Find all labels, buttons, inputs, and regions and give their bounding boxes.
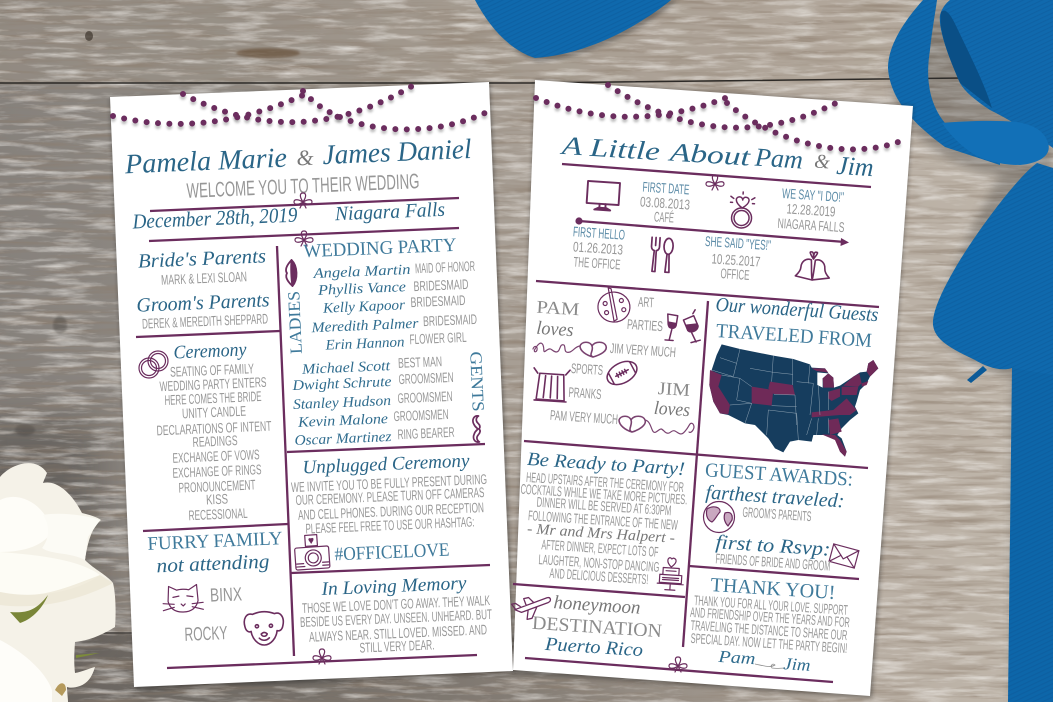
ceremony list: UNITY CANDLE [182,403,246,421]
paragraph: memory: STILL VERY DEAR. [359,636,435,656]
panel: guest awards: FRIENDS OF BRIDE AND GROOM [715,550,831,574]
ladies names: Angela Martin [312,262,411,282]
parents block [136,245,280,337]
event: we say I do [777,185,845,235]
title: couple names: Pamela Marie [123,143,288,180]
panel: furry family: not attending [156,551,270,577]
panel: jim loves: JIM [657,378,691,400]
paragraph: party details: AFTER DINNER, EXPECT LOTS OF [541,536,659,560]
signature: Jim [783,654,811,675]
event: she said yes: OFFICE [720,265,750,283]
paragraph: unplugged: OUR CEREMONY. PLEASE TURN OFF CAMERAS [295,484,485,508]
date and place banner: December 28th, 2019 [131,203,298,233]
icon: fork and spoon [650,237,674,273]
icon: airplane [511,593,553,622]
ladies names: BRIDESMAID [413,276,469,294]
paragraph: party details: HEAD UPSTAIRS AFTER THE CEREMONY FOR [526,469,684,495]
icon: lips [286,260,297,286]
panel: be ready to party: Be Ready to Party! [526,449,686,480]
subtitle: WELCOME YOU TO THEIR WEDDING [186,170,420,203]
paragraph: unplugged [291,471,487,537]
panel: furry family [143,524,288,646]
panel: pam loves: loves [536,318,574,341]
panel: pam loves: PRANKS [568,384,602,402]
event: she said yes: SHE SAID "YES!" [705,233,771,253]
icon: cat [163,584,203,613]
gents names: RING BEARER [397,424,455,442]
parents block: MARK & LEXI SLOAN [161,268,247,288]
ceremony list [156,360,272,523]
ceremony list: DECLARATIONS OF INTENT [156,418,272,438]
event: first date [640,179,691,226]
icon: mustache [473,416,480,442]
paragraph: party details: LAUGHTER, NON-STOP DANCING [538,551,660,575]
gents names: Dwight Schrute [291,374,392,394]
paragraph: party details: DINNER WILL BE SERVED AT 6:30PM [536,494,672,518]
panel: right about-the-couple card [511,80,913,696]
panel: honeymoon [511,584,685,661]
icon: envelope [829,544,859,568]
gents names: GROOMSMEN [397,388,453,406]
paragraph: unplugged: WE INVITE YOU TO BE FULLY PRESENT DURING [291,471,487,495]
string lights, right card [536,85,908,152]
icon: pranks whoopee [532,368,570,402]
title: a little about: & [814,151,831,173]
ladies names: Meredith Palmer [310,316,419,336]
timeline arrow [575,217,849,246]
panel: pam loves: ART [638,293,655,311]
panel: jim loves [550,378,694,434]
gents names: Kevin Malone [297,411,389,431]
paragraph: thanks [690,592,850,656]
parents block: Bride's Parents [138,245,267,273]
parents block: DEREK & MEREDITH SHEPPARD [142,310,268,332]
ladies label: LADIES [284,291,306,354]
paragraph: memory: THOSE WE LOVE DON'T GO AWAY. THEY WALK [302,592,491,616]
icon: globe [704,502,734,532]
icon: hearts with squiggle [619,416,694,434]
panel: guest awards [704,459,859,574]
panel: in loving memory: In Loving Memory [320,573,467,600]
paragraph: party details: FOLLOWING THE ENTRANCE OF THE NEW [528,507,679,533]
date and place banner [131,193,459,246]
blue ribbon bow, right edge [888,0,1053,702]
paragraph: party details [520,469,688,587]
title: a little about: About [667,137,752,172]
panel: unplugged ceremony: Unplugged Ceremony [302,451,470,478]
icon: art palette [597,287,631,323]
panel: be ready to party [520,441,868,591]
icon: wine glasses [665,308,702,343]
paragraph: memory: BESIDE US EVERY DAY. UNSEEN. UNHEARD. BUT [300,606,493,630]
panel: jim loves: loves [653,398,691,421]
paragraph: unplugged: PLEASE FEEL FREE TO USE OUR HASHTAG: [305,513,475,537]
ceremony list: SEATING OF FAMILY [170,360,255,380]
ceremony list: EXCHANGE OF RINGS [172,461,262,481]
panel: guest awards: first to Rsvp: [715,531,831,561]
ceremony list: WEDDING PARTY ENTERS [159,374,267,394]
panel: honeymoon: Puerto Rico [543,634,644,661]
panel: map of guests: Our wonderful Guests [715,294,879,326]
paragraph: memory [300,592,493,656]
ladies names: FLOWER GIRL [409,329,467,347]
paragraph: thanks: SPECIAL DAY. NOW LET THE PARTY BEGIN! [690,630,848,656]
right card shadow [513,80,913,698]
signature [717,647,811,675]
panel: honeymoon: DESTINATION [531,613,663,642]
paragraph: thanks: AND FRIENDSHIP OVER THE YEARS AND FOR [690,604,850,630]
icon: computer monitor [586,181,620,211]
gents names: Oscar Martinez [294,429,392,449]
US map with highlighted states [709,344,878,457]
icon: dog [244,611,284,646]
icon: football [603,357,641,389]
panel: thank you [689,566,859,675]
signature: Pam [717,647,756,668]
event: first hello [573,223,626,272]
gents label: GENTS [466,351,488,412]
event: first hello: THE OFFICE [573,254,621,272]
ladies names: Phyllis Vance [317,279,407,299]
divider: main column line [277,246,294,656]
event: first hello: 01.26.2013 [573,238,624,258]
panel: furry family: BINX [210,584,243,607]
icon: wedding bells [795,251,831,281]
panel: thank you: THANK YOU! [710,574,836,604]
parents block: Groom's Parents [136,289,270,317]
panel: in loving memory [300,573,493,656]
paragraph: party details: - Mr and Mrs Halpert - [527,521,675,547]
event: we say I do: NIAGARA FALLS [777,215,845,235]
ceremony list: READINGS [192,432,238,450]
ladies names: BRIDESMAID [410,292,466,310]
icon: squiggle with hearts [533,342,606,357]
paragraph: memory: ALWAYS NEAR. STILL LOVED. MISSED. AND [309,621,487,645]
title: couple names: & [296,145,315,170]
panel: pam loves [532,287,702,402]
paragraph: party details: AND DELICIOUS DESSERTS! [549,565,649,587]
ladies names: BRIDESMAID [423,311,477,329]
title: a little about: A Little [559,131,661,166]
timeline [573,179,849,283]
date and place banner: Niagara Falls [334,199,446,225]
ceremony list: EXCHANGE OF VOWS [172,446,260,466]
paragraph: thanks: THANK YOU FOR ALL YOUR LOVE. SUPPORT [694,592,849,618]
panel: wedding party [284,235,488,452]
gents names: GROOMSMEN [398,369,454,387]
panel: wedding party: WEDDING PARTY [303,235,457,262]
panel: left wedding program card [110,82,513,687]
panel: pam loves: PARTIES [627,316,663,334]
ladies names: Erin Hannon [324,334,405,354]
bottom rule with bow [525,657,833,682]
icon: diamond ring [729,191,755,229]
panel: unplugged ceremony: #OFFICELOVE [334,540,450,565]
gents names: BEST MAN [398,353,442,371]
ladies names: MAID OF HONOR [415,258,475,276]
icon: wedding cake [657,557,685,591]
paragraph: party details: COCKTAILS WHILE WE TAKE MORE PICTURES. [520,481,688,507]
title: couple names [123,134,472,180]
panel: furry family: FURRY FAMILY [147,528,283,555]
gents names [291,353,455,449]
event: first date: CAFÉ [654,208,674,226]
panel: pam loves: SPORTS [571,360,603,378]
bottom rule with bow [167,649,477,668]
event: first date: 03.08.2013 [640,193,691,213]
gents names: Stanley Hudson [293,393,391,413]
panel: map of guests [709,294,879,457]
left card shadow [110,83,515,690]
paragraph: thanks: TRAVELING THE DISTANCE TO SHARE OUR [690,617,848,643]
title: a little about: Pam [753,142,804,175]
blue ribbon, top centre [475,0,678,62]
title: a little about [559,131,874,190]
event: she said yes [705,233,771,283]
ladies names: Kelly Kapoor [322,297,406,317]
panel: honeymoon: honeymoon [553,592,641,619]
paragraph: unplugged: AND CELL PHONES. DURING OUR RECEPTION [298,499,484,523]
panel: unplugged ceremony [291,451,490,573]
panel: pam loves: JIM VERY MUCH [610,340,676,360]
ladies names [310,258,477,354]
title: a little about: Jim [836,151,874,182]
icon: camera [294,534,330,570]
panel: guest awards: GROOM'S PARENTS [742,504,812,524]
panel: guest awards: GUEST AWARDS: [704,459,854,491]
panel: ceremony order [139,339,272,523]
event: first hello: FIRST HELLO [573,223,626,243]
panel: jim loves: PAM VERY MUCH [550,407,618,427]
gents names: Michael Scott [301,358,391,378]
gents names: GROOMSMEN [393,406,449,424]
panel: map of guests: TRAVELED FROM [715,320,873,352]
ceremony list: HERE COMES THE BRIDE [164,388,262,408]
icon: wedding rings [139,351,168,378]
event: she said yes: 10.25.2017 [711,250,761,270]
panel: furry family: ROCKY [184,623,228,646]
ceremony list: RECESSIONAL [188,505,248,523]
panel: guest awards: farthest traveled: [705,482,845,512]
ceremony list: PRONOUNCEMENT [178,476,256,496]
title: couple names: James Daniel [322,134,472,171]
ceremony list: KISS [206,491,228,507]
ceremony heading: Ceremony [173,339,247,364]
string lights, left card [113,86,487,132]
event: first date: FIRST DATE [642,179,690,197]
event: we say I do: WE SAY "I DO!" [782,185,844,205]
white rose, lower left [0,463,116,702]
event: we say I do: 12.28.2019 [786,200,836,220]
panel: pam loves: PAM [536,297,580,319]
